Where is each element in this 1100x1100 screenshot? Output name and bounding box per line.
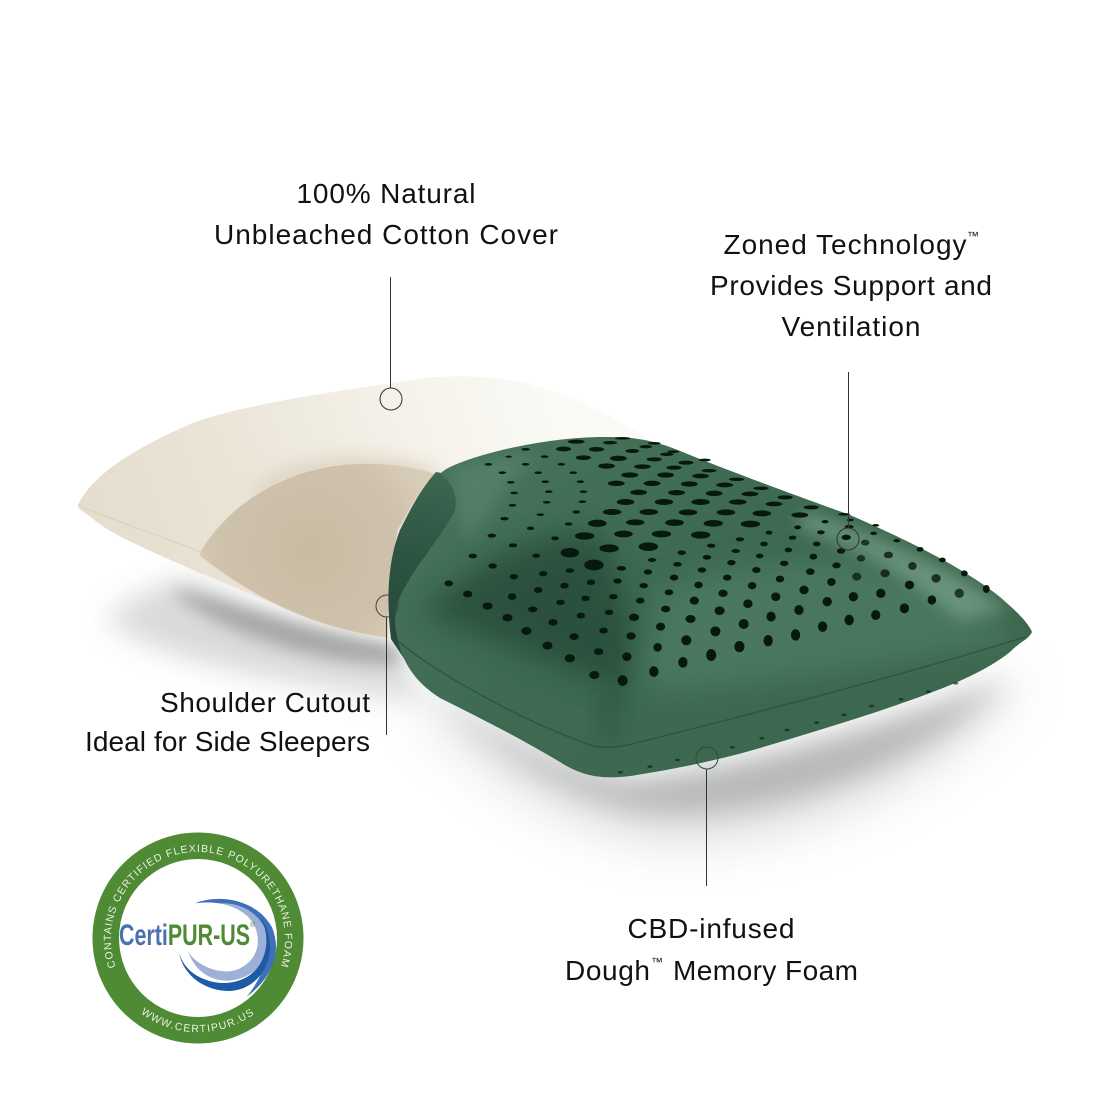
foam shading <box>426 458 1008 726</box>
callout: natural cotton cover: Unbleached Cotton Cover <box>214 219 558 250</box>
foam perforations <box>445 437 990 774</box>
badge: CertiPUR-US seal <box>92 832 304 1044</box>
callout: zoned technology: Zoned Technology <box>724 229 966 260</box>
callout: CBD-infused memory foam: Dough <box>565 955 650 986</box>
badge ring text: WWW.CERTIPUR.US <box>142 1007 254 1032</box>
callout: natural cotton cover: 100% Natural <box>296 178 476 209</box>
callout: CBD-infused memory foam: ™ <box>651 955 663 969</box>
callout: shoulder cutout: Ideal for Side Sleepers <box>85 726 370 757</box>
callout: zoned technology: Ventilation <box>782 311 920 342</box>
callout: zoned technology: Provides Support and <box>710 270 992 301</box>
inner shoulder cutout of foam <box>388 472 480 660</box>
badge: CertiPUR-US seal: ® <box>250 921 256 929</box>
badge swoosh logo <box>179 899 276 997</box>
badge wordmark: CertiPUR-US <box>119 919 250 952</box>
shadow under pillow <box>105 579 1030 845</box>
pillow: cotton cover <box>78 376 650 640</box>
callout: shoulder cutout: Shoulder Cutout <box>160 687 370 718</box>
callout: CBD-infused memory foam: CBD-infused <box>628 913 794 944</box>
callout: natural cotton cover <box>214 178 558 410</box>
badge ring text <box>104 844 292 1032</box>
callout: CBD-infused memory foam: Memory Foam <box>673 955 858 986</box>
callout: zoned technology <box>710 229 992 550</box>
shoulder cutout fabric <box>200 463 440 638</box>
badge ring text: CONTAINS CERTIFIED FLEXIBLE POLYURETHANE FOAM <box>104 844 292 968</box>
infographic canvas <box>78 183 1032 1044</box>
callout: shoulder cutout <box>85 595 398 757</box>
pillow: green foam <box>395 437 1032 777</box>
callout: CBD-infused memory foam <box>565 747 858 986</box>
callout: zoned technology: ™ <box>967 229 979 243</box>
foam seam <box>397 637 1025 747</box>
